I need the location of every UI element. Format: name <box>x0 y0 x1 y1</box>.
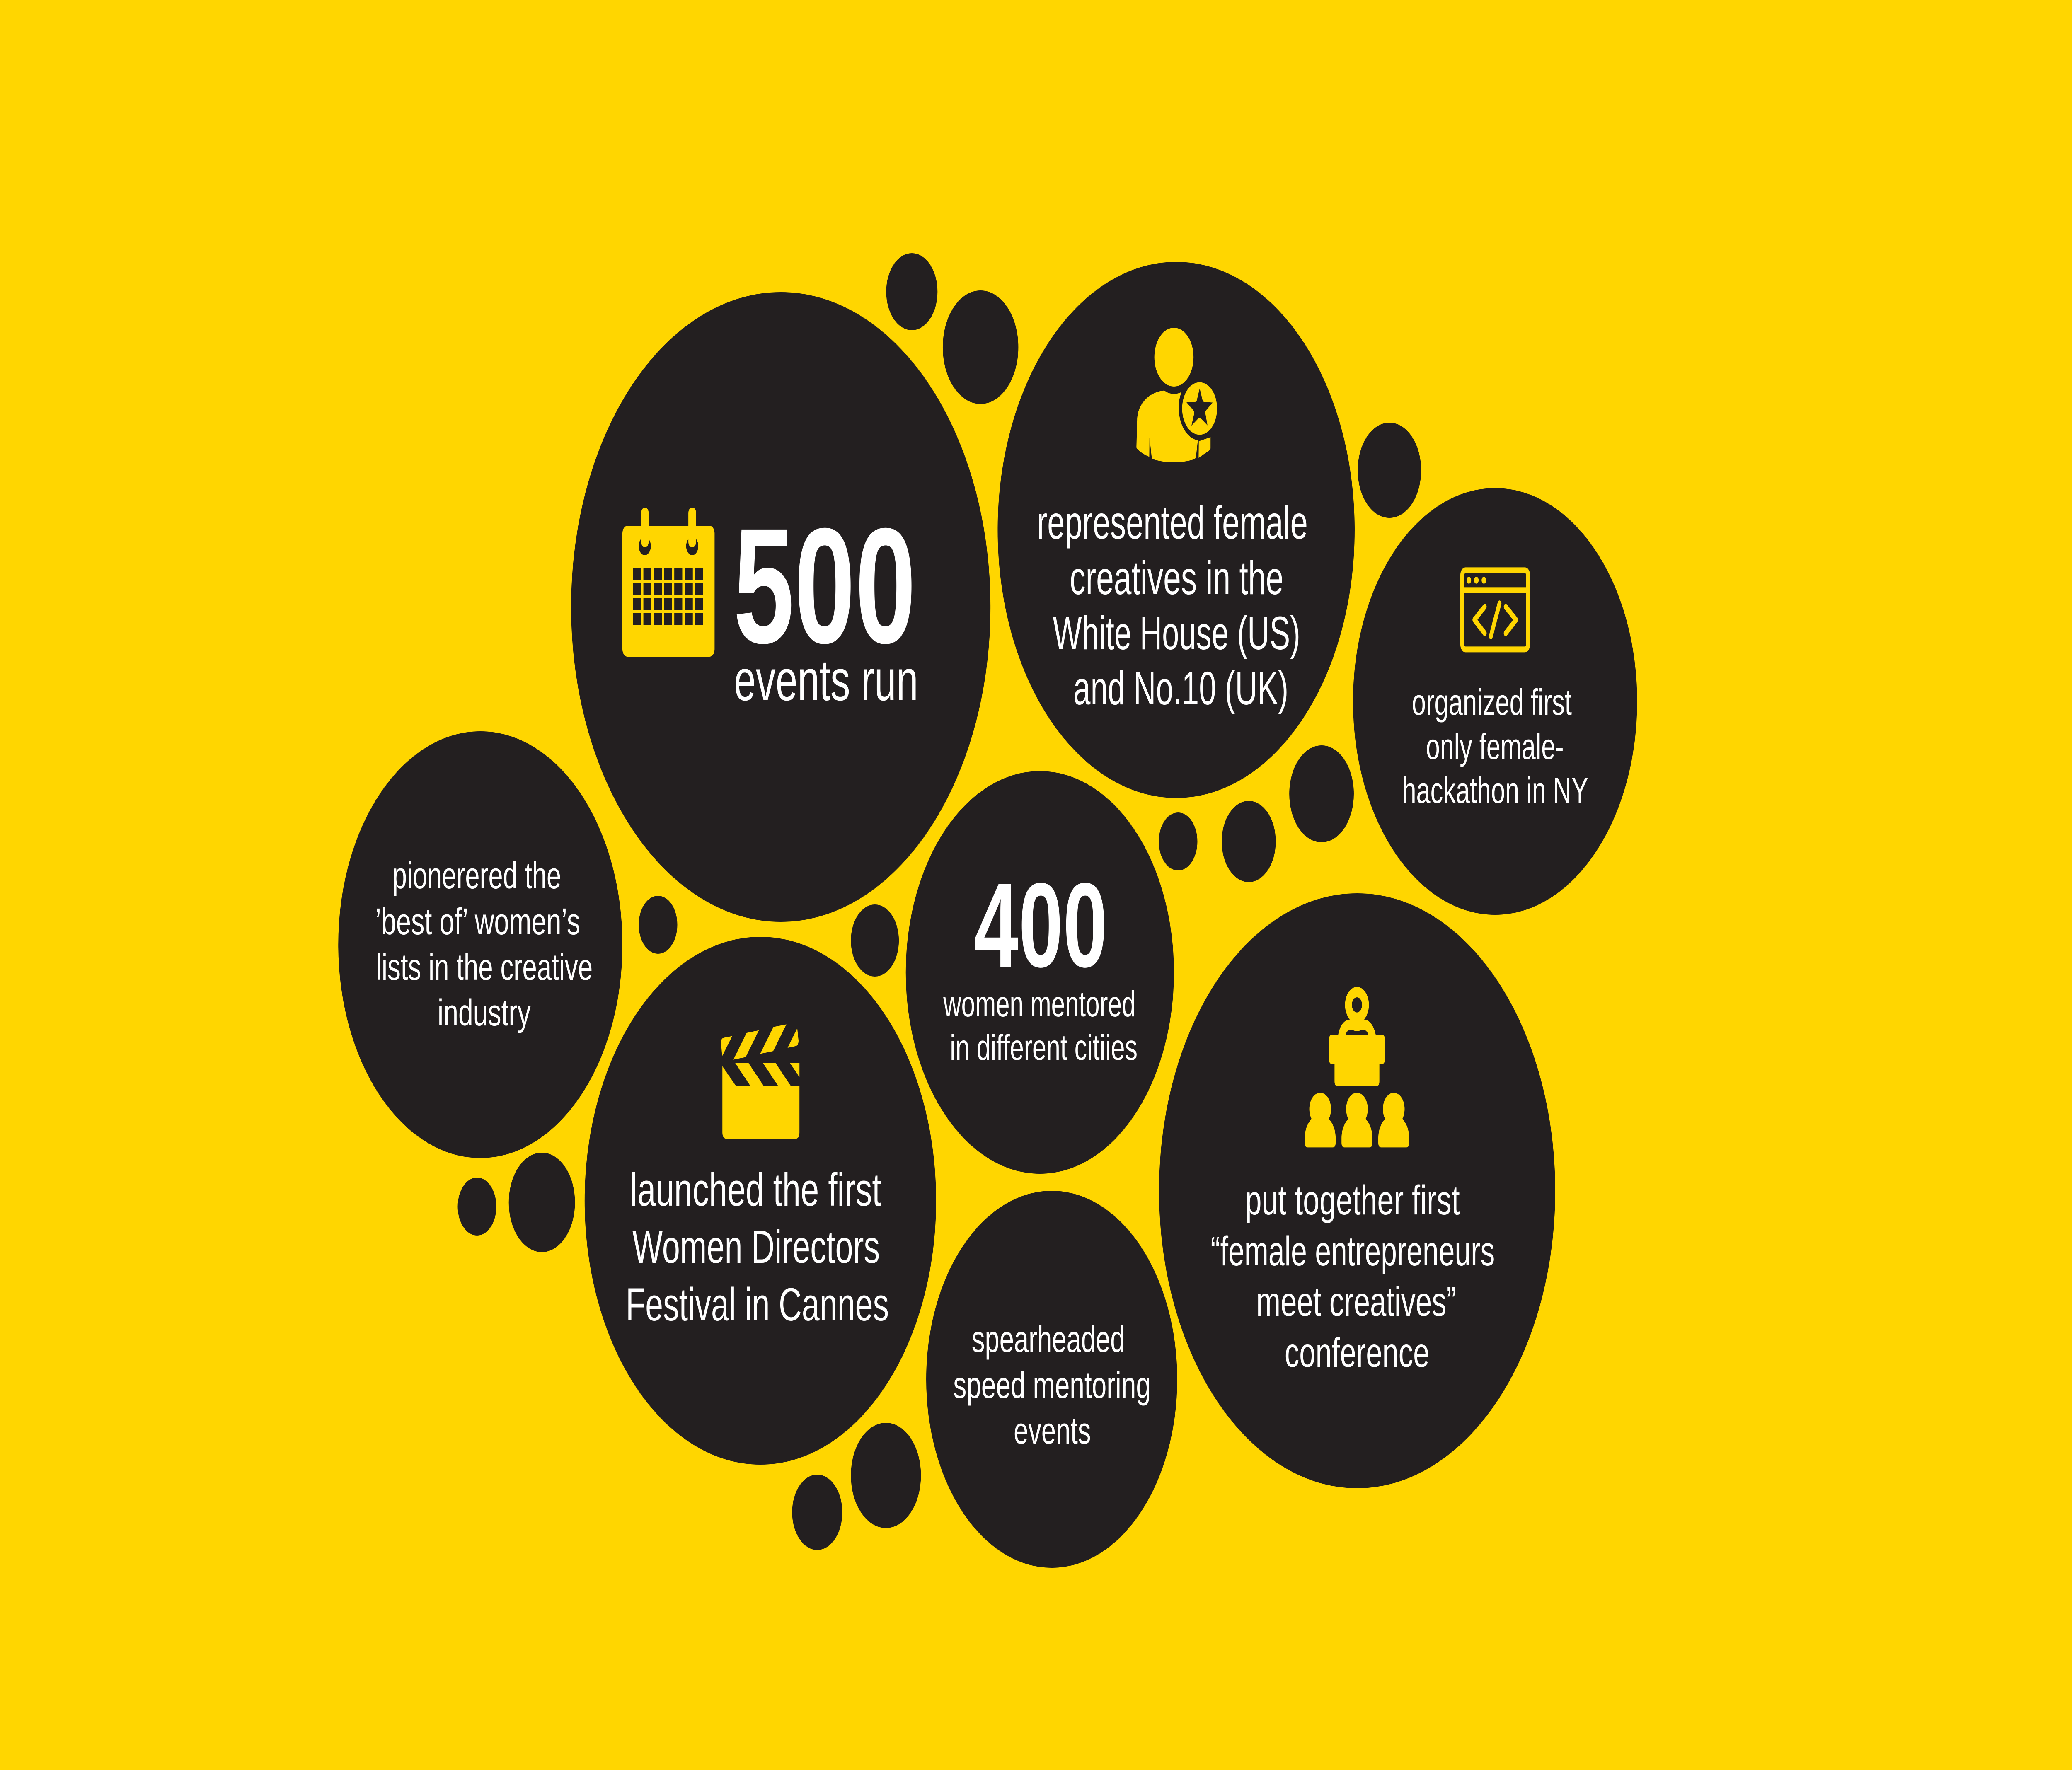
text: put together first female entrepreneurs meet creatives conference: “female entrepreneurs <box>1210 1228 1495 1274</box>
text: women mentored in different cities: women mentored <box>943 984 1135 1024</box>
number: 400: 400 <box>974 858 1107 992</box>
text: spearheaded speed mentoring events: events <box>1014 1410 1091 1452</box>
text: represented female creatives: White House (US) <box>1053 607 1300 660</box>
text: put together first female entrepreneurs meet creatives conference: conference <box>1285 1329 1429 1376</box>
text: organized first only female hackathon: organized first <box>1412 682 1572 723</box>
panel: represented female creatives <box>997 262 1355 798</box>
text: spearheaded speed mentoring events: spearheaded <box>972 1319 1125 1360</box>
text: represented female creatives <box>1037 497 1308 715</box>
icon: code window <box>1462 570 1528 649</box>
text: put together first female entrepreneurs meet creatives conference <box>1210 1177 1495 1376</box>
text: spearheaded speed mentoring events: speed mentoring <box>953 1365 1151 1406</box>
panel: pioneered best-of lists <box>338 731 622 1158</box>
text: pionerered the best of women's lists <box>375 855 593 1034</box>
small decorative bubbles <box>458 253 1421 1550</box>
icon: speaker at podium with audience <box>1305 992 1409 1147</box>
panel: organized hackathon <box>1353 488 1637 915</box>
text: launched the first Women Directors Festival in Cannes: launched the first <box>630 1164 881 1216</box>
panel: spearheaded speed mentoring <box>926 1191 1177 1568</box>
panel: female entrepreneurs conference <box>1159 893 1555 1488</box>
panel: launched Women Directors Festival <box>585 937 936 1465</box>
icon: person with star badge <box>1136 328 1217 462</box>
text: organized first only female hackathon: only female- <box>1426 726 1564 767</box>
text: pionerered the best of women's lists: pionerered the <box>392 855 561 897</box>
text: represented female creatives: creatives in the <box>1070 552 1283 605</box>
text: pionerered the best of women's lists: industry <box>438 992 531 1034</box>
text: represented female creatives: represented female <box>1037 497 1308 549</box>
text: put together first female entrepreneurs meet creatives conference: meet creatives” <box>1256 1278 1456 1325</box>
icon: calendar <box>622 508 714 657</box>
text: pionerered the best of women's lists: ’best of’ women’s <box>375 901 580 943</box>
text: organized first only female hackathon: hackathon in NY <box>1402 770 1588 811</box>
text: launched the first Women Directors Festival in Cannes: Festival in Cannes <box>626 1279 889 1331</box>
text: spearheaded speed mentoring events <box>953 1319 1151 1452</box>
text: women mentored in different cities <box>943 984 1138 1068</box>
panel: 400 women mentored <box>906 771 1174 1174</box>
text: launched the first Women Directors Festival in Cannes: Women Directors <box>632 1221 880 1273</box>
text: organized first only female hackathon <box>1402 682 1588 811</box>
text: launched the first Women Directors Festival in Cannes <box>626 1164 889 1331</box>
number: 500: 500 <box>733 494 916 678</box>
text: represented female creatives: and No.10 (UK) <box>1073 663 1288 715</box>
text: women mentored in different cities: in different citiies <box>950 1027 1138 1068</box>
text: put together first female entrepreneurs meet creatives conference: put together first <box>1245 1177 1460 1223</box>
text: pionerered the best of women's lists: lists in the creative <box>376 947 593 988</box>
label: events run: events run <box>734 648 918 713</box>
icon: clapperboard <box>721 1024 799 1139</box>
panel: 500 events run <box>571 292 990 922</box>
